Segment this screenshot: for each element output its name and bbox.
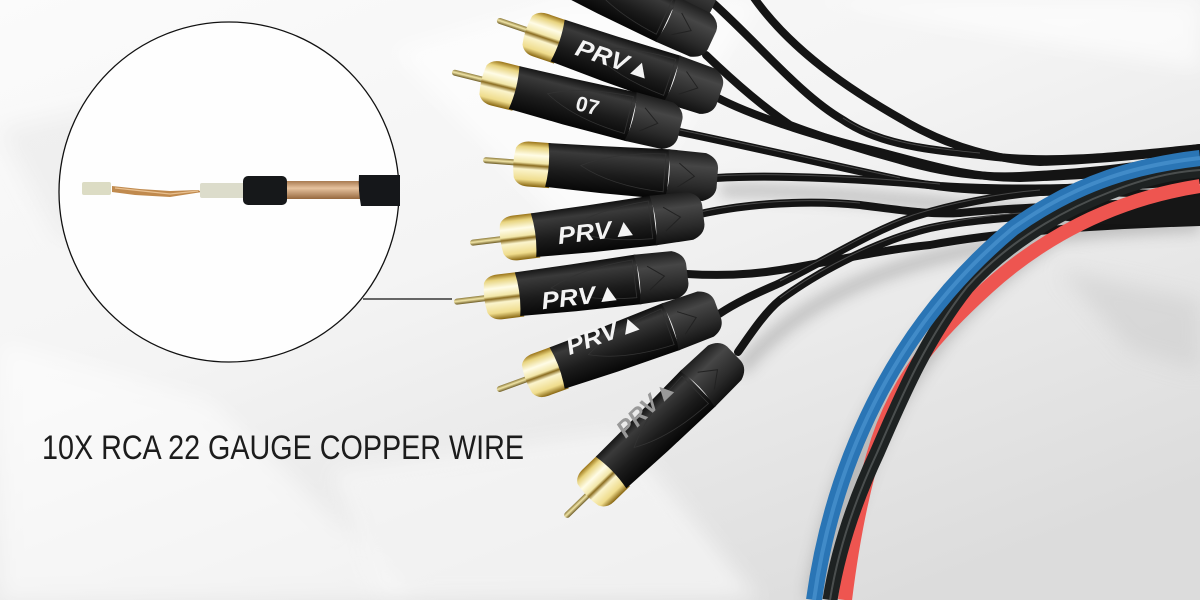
connector: PRV 5: PRV▲ [611,374,682,443]
connector: 07 [446,48,686,153]
connector: PRV 5 [541,329,751,535]
connector: PRV 1 [489,0,728,119]
blue cable [814,158,1200,600]
callout circle with stripped wire [59,22,400,362]
connector: PRV 2: PRV▲ [556,214,639,250]
connector: 07: 07 [573,92,602,120]
caption: 10X RCA 22 GAUGE COPPER WIRE [42,429,524,467]
connector: PRV 1: PRV▲ [572,35,657,86]
connector: PRV 4: PRV▲ [562,308,647,361]
black power cable [830,170,1200,600]
connector: PRV 3: PRV▲ [540,279,623,315]
connector: PRV 3 [451,249,690,327]
connector: PRV 2 [467,190,706,268]
callout leader line [363,298,452,300]
connector: PRV 4 [487,282,726,413]
red cable [845,186,1200,600]
black signal cables [680,0,1200,352]
stripped wire [82,175,400,206]
cable shadows [720,184,1200,600]
connector: partial top 1 [488,0,723,63]
connector: partial top 0 [491,0,726,25]
connector: unlabeled [481,135,719,203]
